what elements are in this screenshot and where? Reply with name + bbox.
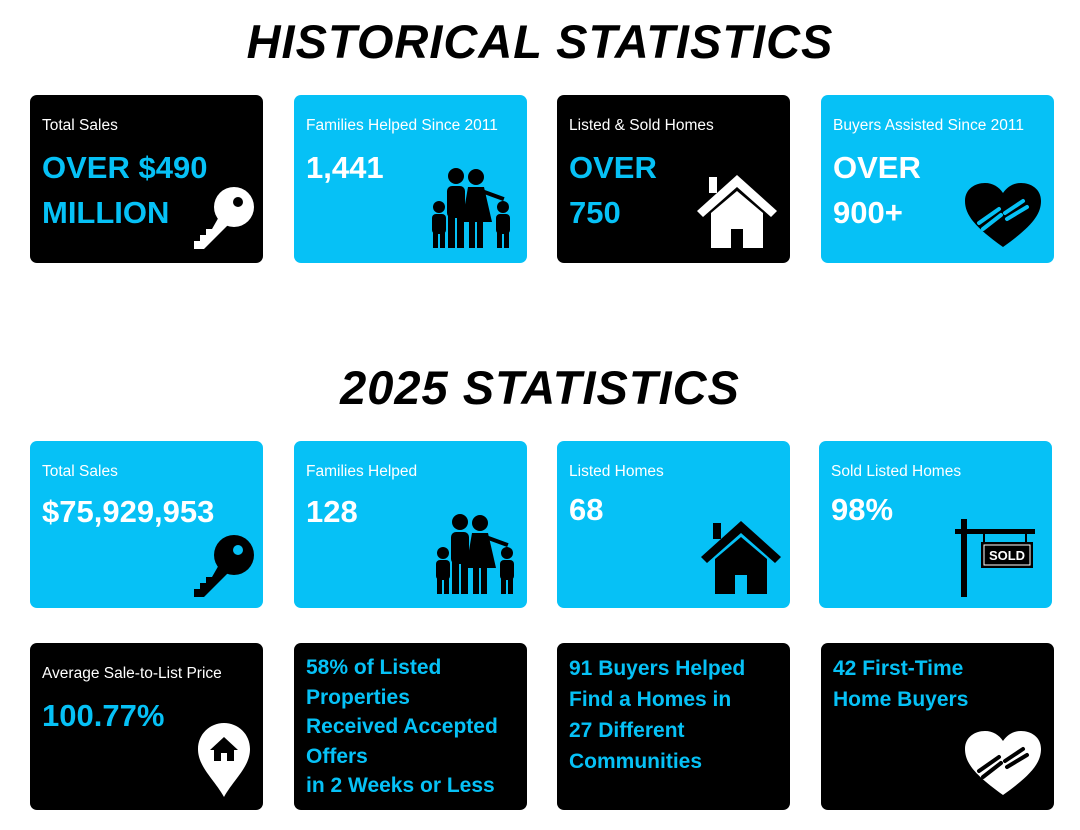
icon: house	[697, 175, 777, 248]
text block	[306, 656, 498, 797]
value: 98%	[831, 492, 893, 527]
value	[833, 150, 921, 230]
card: total sales 2025	[30, 441, 263, 608]
text block: Received Accepted	[306, 715, 498, 738]
card: families helped	[294, 441, 527, 608]
card: listed homes: Listed Homes	[569, 463, 664, 480]
card: sale-to-list	[30, 643, 263, 810]
text block: 58% of Listed	[306, 656, 441, 679]
card: buyers assisted	[821, 95, 1054, 263]
text block: Communities	[569, 750, 702, 773]
icon: family	[436, 514, 514, 594]
icon: key	[194, 187, 254, 249]
card: total sales 2025: Total Sales	[42, 463, 118, 480]
icon: house	[701, 521, 781, 594]
value: 68	[569, 492, 603, 527]
value	[569, 150, 657, 230]
card: buyers assisted: Buyers Assisted Since 2011	[833, 117, 1024, 134]
text block: 42 First-Time	[833, 657, 963, 680]
value: 128	[306, 494, 358, 529]
icon: family	[432, 168, 510, 248]
value: 1,441	[306, 150, 384, 185]
value: OVER $490	[42, 150, 207, 185]
icon: heart hands	[965, 731, 1041, 795]
card: 91 buyers	[557, 643, 790, 810]
text block: Home Buyers	[833, 688, 968, 711]
card: sold listed homes: Sold Listed Homes	[831, 463, 961, 480]
card: sale-to-list: Average Sale-to-List Price	[42, 665, 222, 682]
card: 58% accepted offers	[294, 643, 527, 810]
text block	[833, 657, 968, 711]
value: MILLION	[42, 195, 169, 230]
icon: location pin	[198, 723, 250, 797]
title: historical: HISTORICAL STATISTICS	[247, 15, 833, 68]
value: 750	[569, 195, 621, 230]
card: sold listed homes	[819, 441, 1052, 608]
card: families helped since 2011: Families Helped Since 2011	[306, 117, 498, 134]
text block: 91 Buyers Helped	[569, 657, 745, 680]
icon: sold sign	[955, 519, 1035, 597]
text block: in 2 Weeks or Less	[306, 774, 495, 797]
card: first-time buyers	[821, 643, 1054, 810]
icon: heart hands	[965, 183, 1041, 247]
title: 2025: 2025 STATISTICS	[340, 361, 740, 414]
text block: Properties	[306, 686, 410, 708]
text block	[569, 657, 745, 773]
card: total sales historical	[30, 95, 263, 263]
text block: Find a Homes in	[569, 688, 731, 711]
text block: Offers	[306, 744, 368, 768]
value: OVER	[569, 150, 657, 185]
card: listed homes	[557, 441, 790, 608]
card: total sales historical: Total Sales	[42, 117, 118, 134]
value	[42, 150, 207, 230]
value: $75,929,953	[42, 494, 214, 529]
value: 900+	[833, 195, 903, 230]
card: families helped: Families Helped	[306, 463, 417, 480]
card: families helped since 2011	[294, 95, 527, 263]
icon: key	[194, 535, 254, 597]
value: 100.77%	[42, 698, 164, 733]
value: OVER	[833, 150, 921, 185]
text block: 27 Different	[569, 719, 685, 742]
icon: sold sign: SOLD	[989, 548, 1025, 563]
card: listed & sold homes: Listed & Sold Homes	[569, 117, 714, 134]
card: listed & sold homes	[557, 95, 790, 263]
